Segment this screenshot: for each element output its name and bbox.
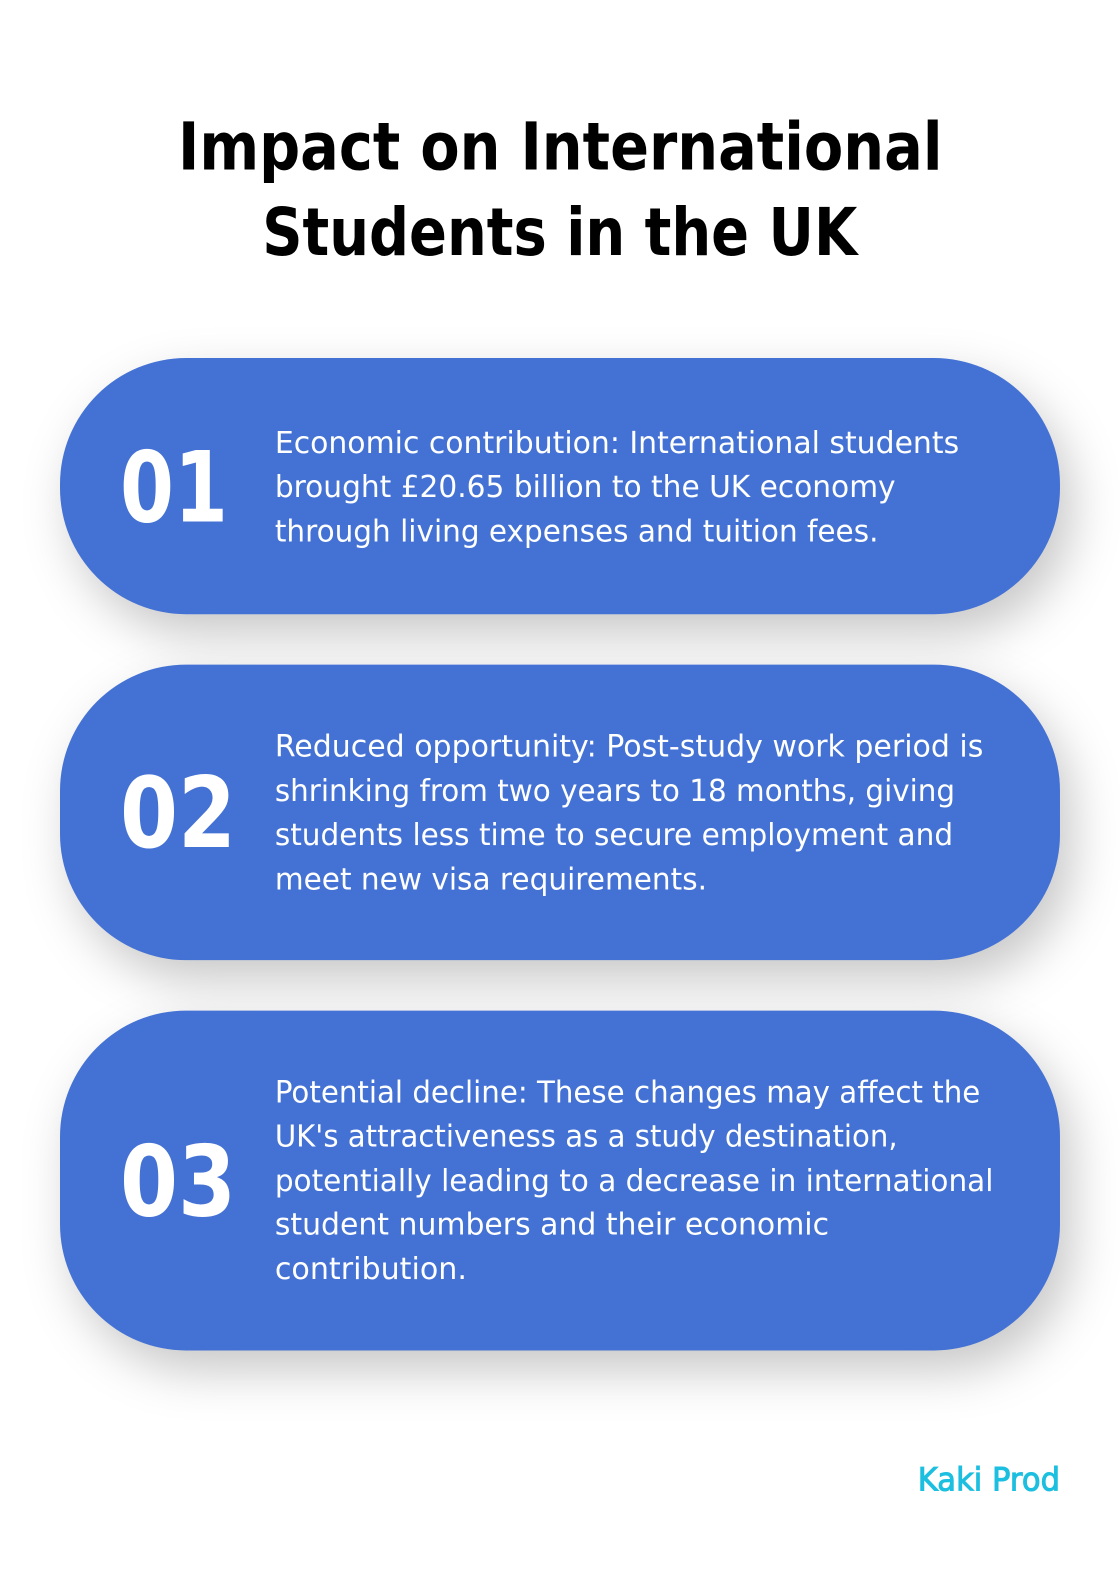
text block 3: contribution. (275, 1252, 467, 1287)
logo: Kaki Prod: Kaki Prod (918, 1461, 1060, 1499)
text block 1 (275, 426, 959, 550)
panel: economic contribution (60, 358, 1060, 614)
text block 3: Potential decline: These changes may affect the (275, 1075, 980, 1110)
title: Students in the UK (262, 195, 859, 271)
number 02: 02 (120, 757, 236, 871)
pill background 2 (60, 665, 1060, 960)
text block 3: UK's attractiveness as a study destination, (275, 1120, 898, 1155)
title (178, 109, 942, 271)
text block 1: brought £20.65 billion to the UK economy (275, 470, 896, 505)
text block 3 (275, 1075, 993, 1287)
text block 2: Reduced opportunity: Post-study work period is (275, 729, 983, 764)
text block 2: students less time to secure employment and (275, 818, 953, 853)
title: Impact on International (178, 109, 942, 185)
text block 2: shrinking from two years to 18 months, giving (275, 774, 955, 809)
number 03: 03 (120, 1125, 236, 1239)
panel: reduced opportunity (60, 665, 1060, 960)
text block 1: through living expenses and tuition fees. (275, 515, 878, 550)
panel: potential decline (60, 1011, 1060, 1350)
text block 2 (275, 729, 983, 898)
text block 3: potentially leading to a decrease in international (275, 1164, 993, 1199)
pill background 1 (60, 358, 1060, 614)
text block 3: student numbers and their economic (275, 1207, 829, 1242)
pill background 3 (60, 1011, 1060, 1350)
text block 2: meet new visa requirements. (275, 863, 707, 898)
number 01: 01 (120, 431, 228, 545)
text block 1: Economic contribution: International students (275, 426, 959, 461)
